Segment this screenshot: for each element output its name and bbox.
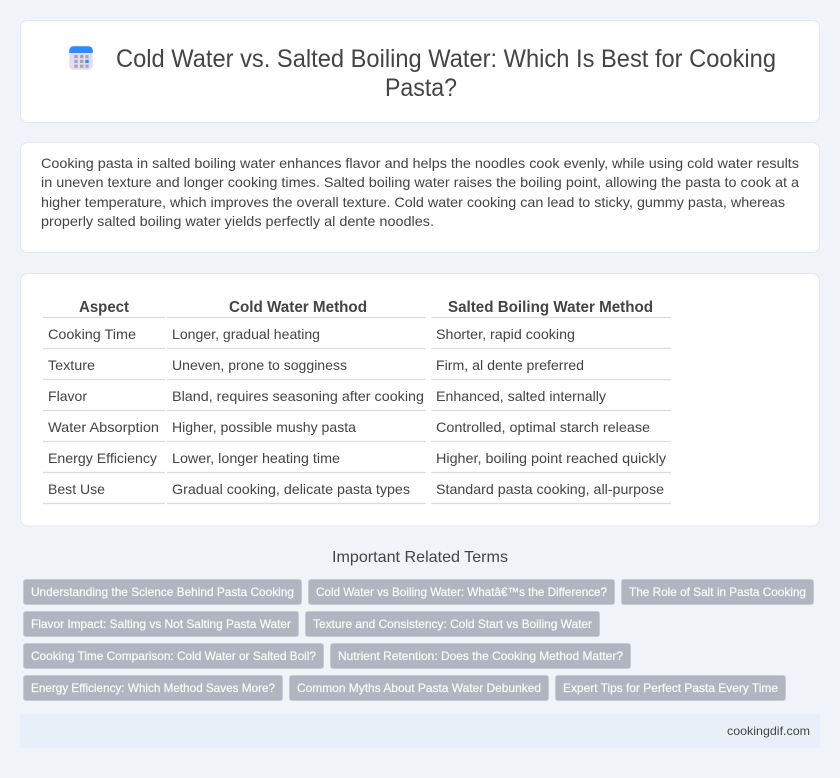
row: cooking time: Cooking Time [48, 326, 136, 342]
footer: cookingdif.com [727, 724, 810, 738]
row: texture: Texture [48, 357, 95, 373]
panel: comparison table [20, 274, 820, 526]
table header: Salted Boiling Water Method [448, 299, 653, 316]
summary paragraph: higher temperature, which improves the overall texture. Cold water cooking can lead to sticky, gummy pasta, whereas [41, 194, 785, 210]
row: flavor [48, 388, 606, 404]
related term chips [24, 580, 814, 700]
row: cooking time: Shorter, rapid cooking [436, 326, 575, 342]
row: water absorption [48, 419, 650, 435]
related term chips: Understanding the Science Behind Pasta Cooking [31, 585, 294, 599]
summary paragraph: Cooking pasta in salted boiling water enhances flavor and helps the noodles cook evenly, while using cold water results [41, 155, 799, 171]
row: water absorption: Water Absorption [48, 419, 159, 435]
table header: Cold Water Method [229, 299, 367, 316]
title: Cold Water vs. Salted Boiling Water: Which Is Best for Cooking [116, 45, 776, 73]
summary paragraph: in uneven texture and longer cooking times. Salted boiling water raises the boiling point, allowing the pasta to cook at a [41, 174, 799, 190]
summary paragraph: properly salted boiling water yields perfectly al dente noodles. [41, 213, 434, 229]
row: cooking time: Longer, gradual heating [172, 326, 320, 342]
title: Pasta? [385, 74, 457, 102]
related term chips: Flavor Impact: Salting vs Not Salting Pasta Water [31, 617, 291, 631]
row: texture [48, 357, 584, 373]
related term chips: Cooking Time Comparison: Cold Water or Salted Boil? [31, 649, 316, 663]
row: best use [48, 481, 664, 497]
panel: summary text [20, 142, 820, 252]
heading: important related terms: Important Related Terms [332, 549, 508, 566]
row: energy efficiency [48, 450, 666, 466]
footer [20, 714, 820, 748]
row: energy efficiency: Lower, longer heating time [172, 450, 340, 466]
related term chips: The Role of Salt in Pasta Cooking [629, 585, 806, 599]
related term chips: Expert Tips for Perfect Pasta Every Time [563, 681, 778, 695]
row: best use: Gradual cooking, delicate pasta types [172, 481, 410, 497]
related term chips: Cold Water vs Boiling Water: Whatâ€™s the Difference? [316, 585, 607, 599]
summary paragraph [41, 155, 799, 229]
row: water absorption: Higher, possible mushy pasta [172, 419, 356, 435]
row: best use: Best Use [48, 481, 105, 497]
row: flavor: Flavor [48, 388, 87, 404]
row: flavor: Enhanced, salted internally [436, 388, 606, 404]
row: water absorption: Controlled, optimal starch release [436, 419, 650, 435]
row: energy efficiency: Higher, boiling point reached quickly [436, 450, 666, 466]
icon: calendar [69, 46, 93, 70]
row: texture: Uneven, prone to sogginess [172, 357, 347, 373]
row: texture: Firm, al dente preferred [436, 357, 584, 373]
row: cooking time [48, 326, 575, 342]
related term chips: Energy Efficiency: Which Method Saves More? [31, 681, 275, 695]
related term chips: Common Myths About Pasta Water Debunked [297, 681, 541, 695]
panel: header [20, 20, 820, 122]
related term chips: Nutrient Retention: Does the Cooking Method Matter? [338, 649, 623, 663]
related term chips: Texture and Consistency: Cold Start vs Boiling Water [313, 617, 592, 631]
table header [79, 299, 653, 316]
title [116, 45, 776, 102]
row: best use: Standard pasta cooking, all-purpose [436, 481, 664, 497]
row: energy efficiency: Energy Efficiency [48, 450, 157, 466]
row: flavor: Bland, requires seasoning after cooking [172, 388, 424, 404]
table header: Aspect [79, 299, 130, 316]
